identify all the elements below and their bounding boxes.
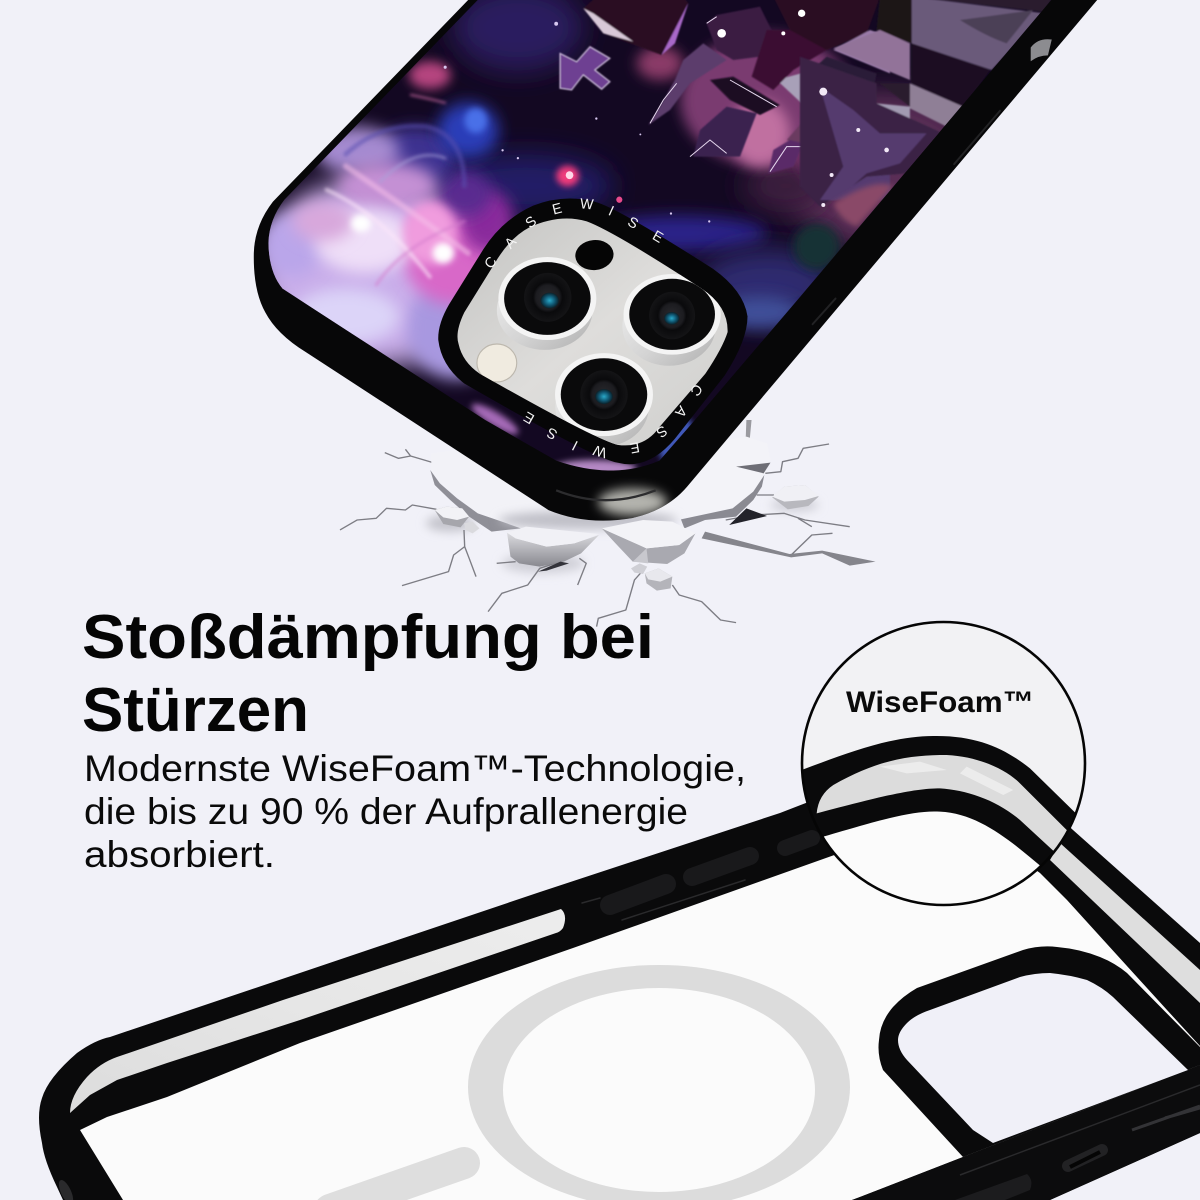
CASEWISE ring lettering: E bbox=[650, 228, 666, 247]
camera cutout opening bbox=[898, 973, 1188, 1143]
heading: Stürzen bbox=[82, 676, 309, 745]
CASEWISE ring lettering: S bbox=[544, 423, 560, 442]
volume buttons bbox=[582, 838, 812, 920]
small rock left bbox=[435, 507, 469, 527]
tiny rocks bbox=[631, 563, 647, 574]
CASEWISE ring lettering bbox=[482, 196, 705, 460]
small rock right bbox=[772, 485, 819, 509]
center left chunk bbox=[507, 533, 599, 567]
camera bump bbox=[438, 196, 748, 464]
magnifier fill bbox=[802, 622, 1085, 905]
CASEWISE ring lettering: W bbox=[591, 441, 609, 460]
right plate bbox=[636, 437, 770, 520]
body text: die bis zu 90 % der Aufprallenergie bbox=[84, 791, 688, 832]
heading: Stoßdämpfung bei bbox=[82, 603, 654, 672]
lens 2 bbox=[622, 274, 721, 366]
CASEWISE ring lettering: C bbox=[686, 380, 705, 399]
CASEWISE ring lettering: W bbox=[579, 196, 595, 214]
flash bbox=[477, 344, 517, 382]
magnified frame detail bbox=[803, 736, 1075, 904]
CASEWISE ring lettering: S bbox=[523, 213, 540, 232]
case side switch highlight bbox=[1031, 39, 1052, 61]
crack lines bbox=[340, 444, 850, 627]
body text bbox=[84, 748, 746, 875]
case body bbox=[254, 0, 1099, 521]
CASEWISE ring lettering: C bbox=[482, 254, 500, 272]
CASEWISE ring lettering: I bbox=[606, 203, 616, 220]
left corner speaker hole bbox=[56, 1178, 76, 1200]
CASEWISE ring lettering: S bbox=[653, 422, 670, 440]
center right chunk bbox=[602, 528, 695, 564]
crystal chess pieces bbox=[560, 0, 890, 200]
CASEWISE ring lettering: A bbox=[671, 402, 690, 420]
black camera ring bbox=[438, 198, 748, 464]
magsafe pill bbox=[330, 1163, 464, 1200]
magnifier outline bbox=[802, 622, 1085, 905]
bottom phone: clear case with black frame bbox=[39, 765, 1200, 1200]
body text: Modernste WiseFoam™-Technologie, bbox=[84, 748, 746, 789]
body text: absorbiert. bbox=[84, 834, 275, 875]
heading bbox=[82, 603, 654, 745]
magnifier callout: WiseFoam bbox=[800, 620, 1086, 906]
left nebula base bbox=[268, 166, 448, 380]
cracked ground impact bbox=[340, 420, 876, 627]
artwork light streaks bbox=[327, 95, 468, 285]
right side prismatic facets bbox=[793, 0, 1053, 270]
magnifier label: WiseFoam™ bbox=[846, 686, 1034, 719]
camera cutout frame bbox=[878, 946, 1200, 1157]
CASEWISE ring lettering: E bbox=[521, 408, 537, 427]
silver phone plate bbox=[457, 219, 728, 445]
black frame bbox=[39, 765, 1200, 1200]
top phone in black case with purple crystal artwork bbox=[242, 0, 1123, 521]
CASEWISE ring lettering: S bbox=[625, 214, 641, 233]
microphone hole bbox=[575, 240, 614, 270]
CASEWISE ring lettering: A bbox=[502, 234, 520, 252]
impact contact shadow bbox=[498, 511, 678, 529]
lens 3 bbox=[555, 353, 653, 447]
slit: clear bumper on long edge bbox=[70, 909, 565, 1113]
lens 1 bbox=[497, 257, 596, 350]
left plate bbox=[431, 433, 588, 528]
slit: clear bumper on top edge bbox=[1050, 843, 1200, 1003]
clear back panel bbox=[80, 834, 1200, 1200]
magsafe ring bbox=[468, 965, 850, 1200]
right wedge crack bbox=[702, 532, 876, 566]
case corner highlight bbox=[556, 489, 667, 516]
CASEWISE ring lettering: I bbox=[570, 437, 581, 453]
side buttons on case bbox=[813, 111, 1000, 324]
CASEWISE ring lettering: E bbox=[551, 200, 564, 219]
CASEWISE ring lettering: E bbox=[629, 438, 641, 456]
artwork bbox=[268, 0, 1051, 470]
lower side rail with ports bbox=[852, 1065, 1200, 1200]
